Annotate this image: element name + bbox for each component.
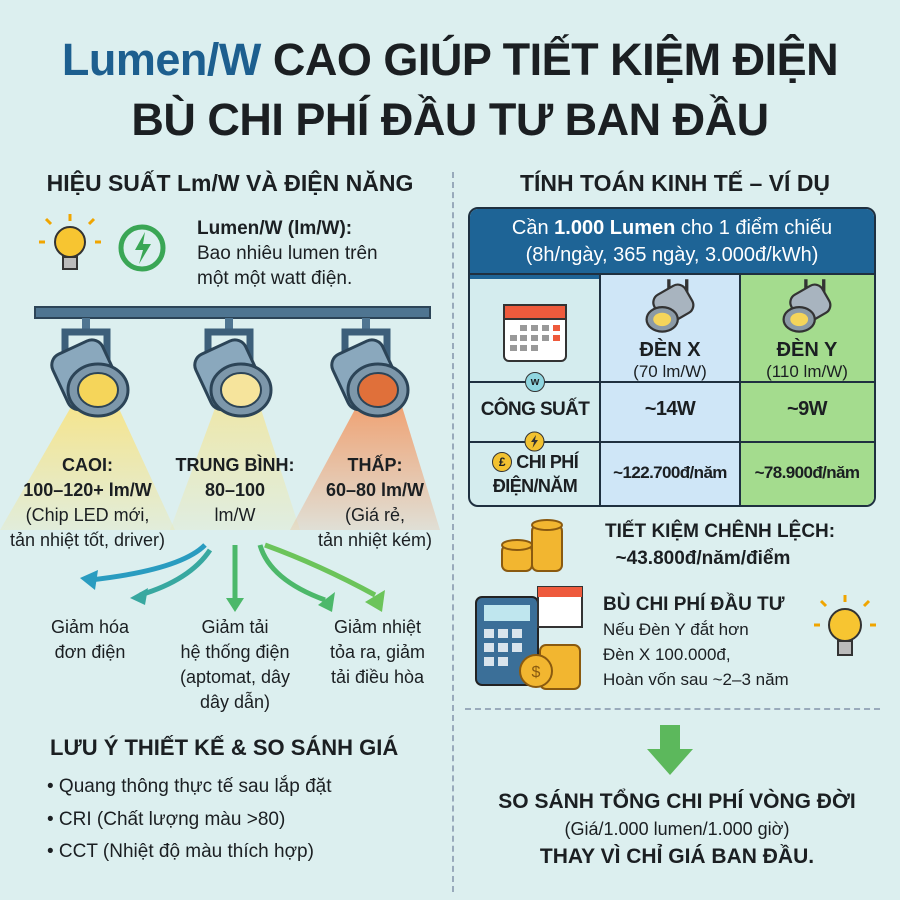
label: low	[318, 454, 432, 550]
den x	[633, 279, 707, 381]
text: payback: Nếu Đèn Y đắt hơn	[603, 620, 749, 639]
den x: ĐÈN X	[639, 339, 701, 361]
row: cost	[492, 452, 580, 496]
text: Giảm nhiệt	[334, 617, 421, 637]
label: high: (Chip LED mới,	[26, 505, 149, 525]
title: Lumen/W CAO GIÚP TIẾT KIỆM ĐIỆN	[62, 34, 838, 85]
icon: calculator: $	[532, 664, 541, 681]
text: payback: Hoàn vốn sau ~2–3 năm	[603, 670, 789, 689]
title	[62, 34, 838, 145]
label: low: THẤP:	[348, 455, 402, 475]
icon: calendar	[503, 304, 567, 362]
conclusion: (Giá/1.000 lumen/1.000 giờ)	[565, 819, 789, 839]
heading: left: HIỆU SUẤT Lm/W VÀ ĐIỆN NĂNG	[47, 170, 413, 196]
track lights	[0, 306, 440, 530]
icon: bulb right	[814, 595, 876, 656]
arrows	[80, 542, 385, 612]
den y	[766, 279, 848, 381]
icon: bulb	[39, 214, 101, 270]
table: ~122.700đ/năm	[613, 463, 727, 482]
text: dây dẫn)	[200, 692, 270, 712]
row: cost: £	[499, 455, 505, 469]
text: tỏa ra, giảm	[330, 642, 425, 662]
table: Cần 1.000 Lumen cho 1 điểm chiếu	[512, 217, 832, 239]
table: (8h/ngày, 365 ngày, 3.000đ/kWh)	[526, 244, 818, 266]
row: power: CÔNG SUẤT	[481, 399, 589, 420]
label: low: (Giá rẻ,	[345, 505, 405, 525]
bullet list: • CRI (Chất lượng màu >80)	[47, 808, 285, 830]
text: (aptomat, dây	[180, 667, 290, 687]
label: high: 100–120+ lm/W	[23, 480, 152, 500]
table: ~78.900đ/năm	[755, 463, 859, 482]
text: savings: TIẾT KIỆM CHÊNH LỆCH:	[605, 521, 835, 542]
icon: calculator	[475, 586, 583, 690]
label: medium	[176, 454, 294, 525]
text: savings	[605, 520, 835, 569]
bullet list: • CCT (Nhiệt độ màu thích hợp)	[47, 841, 314, 862]
text: payback: Đèn X 100.000đ,	[603, 645, 731, 664]
text: tải điều hòa	[331, 667, 424, 687]
label: high: tản nhiệt tốt, driver)	[10, 530, 165, 550]
conclusion	[498, 788, 856, 868]
label: medium: TRUNG BÌNH:	[176, 455, 294, 475]
table: ~14W	[645, 398, 695, 420]
table: w	[531, 376, 539, 388]
text: lumen/w definition: Lumen/W (lm/W):	[197, 218, 352, 239]
bullet list: • Quang thông thực tế sau lắp đặt	[47, 776, 332, 797]
label: high: CAOI:	[62, 455, 113, 475]
bullet list	[47, 775, 332, 862]
label: low: tản nhiệt kém)	[318, 530, 432, 550]
row: cost: CHI PHÍ	[516, 452, 578, 472]
label: medium: 80–100	[205, 480, 265, 500]
table: ~9W	[787, 398, 827, 420]
effect texts	[51, 617, 129, 662]
text: lumen/w definition: Bao nhiêu lumen trên	[197, 243, 378, 264]
text: lumen/w definition: một một watt điện.	[197, 268, 352, 289]
icon: power	[118, 224, 166, 272]
arrow: down	[647, 725, 693, 775]
label: medium: lm/W	[214, 505, 255, 525]
label: high	[10, 455, 165, 550]
conclusion: THAY VÌ CHỈ GIÁ BAN ĐẦU.	[540, 845, 814, 868]
effect texts: đơn điện	[55, 642, 125, 662]
conclusion: SO SÁNH TỔNG CHI PHÍ VÒNG ĐỜI	[498, 790, 856, 813]
title: BÙ CHI PHÍ ĐẦU TƯ BAN ĐẦU	[131, 94, 769, 145]
heading: notes: LƯU Ý THIẾT KẾ & SO SÁNH GIÁ	[50, 735, 398, 760]
den y: ĐÈN Y	[777, 339, 837, 361]
heading: right: TÍNH TOÁN KINH TẾ – VÍ DỤ	[520, 170, 830, 196]
text: payback: BÙ CHI PHÍ ĐẦU TƯ	[603, 594, 784, 615]
text: hệ thống điện	[180, 642, 290, 662]
text: Giảm tải	[201, 617, 269, 637]
table	[468, 207, 876, 507]
text: payback	[603, 592, 789, 689]
text: lumen/w definition	[197, 218, 378, 289]
effect texts: Giảm hóa	[51, 617, 129, 637]
row: cost: ĐIỆN/NĂM	[493, 476, 577, 496]
den y: (110 lm/W)	[766, 362, 848, 381]
den x: (70 lm/W)	[633, 362, 707, 381]
label: low: 60–80 lm/W	[326, 480, 424, 500]
icon: coins	[501, 519, 563, 572]
text: savings: ~43.800đ/năm/điểm	[616, 548, 790, 569]
